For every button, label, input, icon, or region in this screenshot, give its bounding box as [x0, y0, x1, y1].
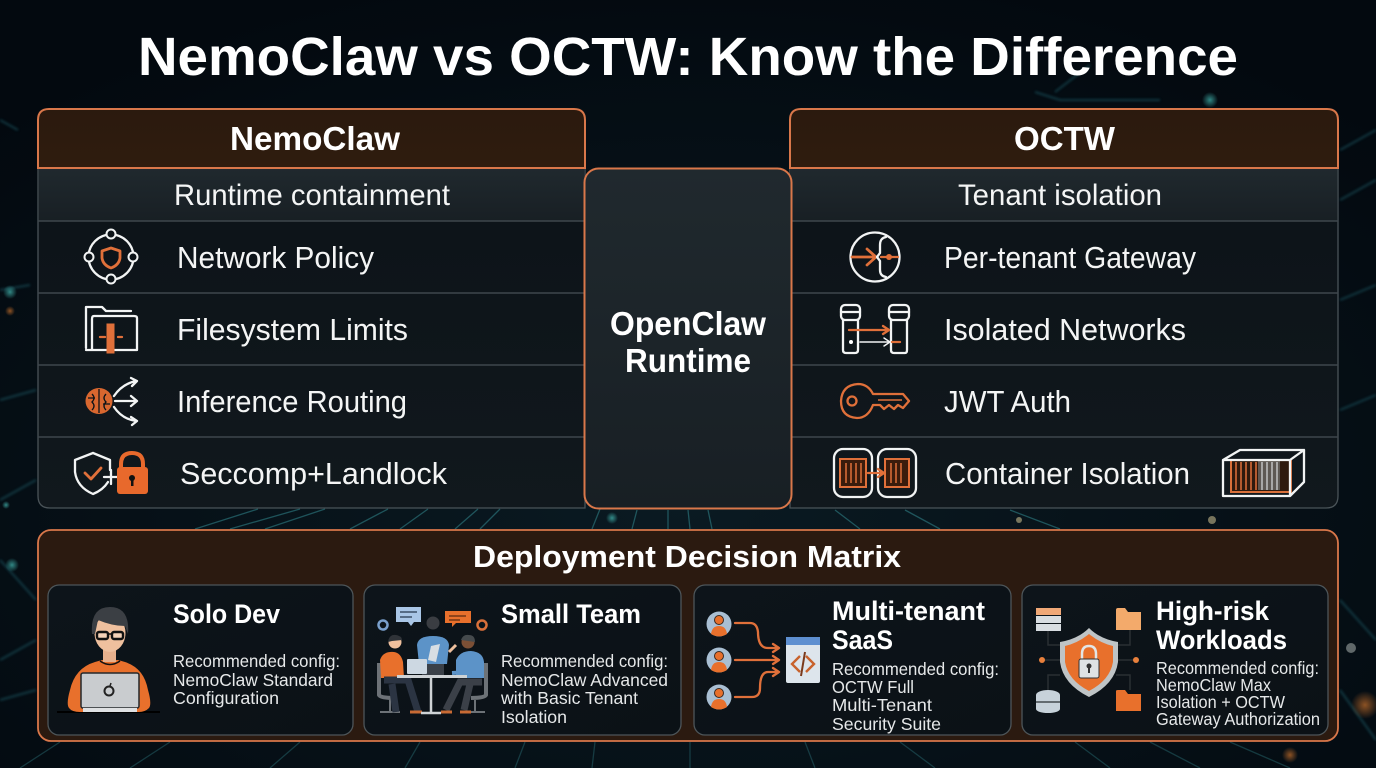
row: Per-tenant Gateway: Per-tenant Gateway — [944, 240, 1196, 275]
card heading: Small Team — [501, 599, 641, 629]
panel header: NemoClaw: NemoClaw — [230, 120, 400, 157]
row: Seccomp+Landlock: Seccomp+Landlock — [180, 456, 447, 491]
panel subheading band — [790, 168, 1338, 221]
panel: NemoClaw — [38, 109, 585, 508]
row: Inference Routing — [86, 378, 407, 425]
row: Isolated Networks — [841, 305, 1186, 353]
panel header: OCTW: OCTW — [1014, 120, 1116, 157]
card: High-risk Workloads — [1022, 585, 1328, 735]
card text — [500, 651, 668, 727]
row: JWT Auth: JWT Auth — [944, 384, 1071, 419]
card text — [832, 659, 999, 734]
panel: Deployment Decision Matrix — [38, 530, 1338, 741]
panel header: OCTW — [790, 109, 1338, 168]
icon: tenants routed to app window — [706, 612, 820, 710]
panel subheading band: Runtime containment — [174, 179, 451, 212]
card text: NemoClaw Standard — [173, 670, 333, 690]
panel header: NemoClaw — [38, 109, 585, 168]
card heading: Multi-tenant — [832, 596, 985, 626]
card heading: Solo Dev — [173, 599, 280, 629]
card text: Gateway Authorization — [1156, 709, 1320, 729]
card text: Isolation + OCTW — [1156, 692, 1285, 712]
row: Container Isolation — [834, 449, 1304, 497]
icon: paired containers — [834, 449, 916, 497]
card text: Configuration — [173, 688, 279, 708]
card text: Recommended config: — [173, 651, 340, 671]
row: Seccomp+Landlock — [75, 453, 447, 494]
icon: network shield — [84, 230, 138, 284]
row: Per-tenant Gateway — [850, 232, 1196, 282]
center panel: OpenClaw Runtime: OpenClaw — [610, 305, 766, 342]
title: NemoClaw vs OCTW: Know the Difference — [138, 27, 1238, 87]
row: Network Policy — [84, 230, 374, 284]
card: Multi-tenant SaaS — [694, 585, 1011, 735]
icon: developer with laptop — [57, 607, 160, 712]
card text: with Basic Tenant — [500, 688, 638, 708]
card heading: High-risk — [1156, 596, 1269, 626]
panel subheading band: Tenant isolation — [958, 179, 1162, 212]
icon: key — [841, 384, 909, 418]
icon: shield and padlock — [75, 453, 148, 494]
row: Container Isolation: Container Isolation — [945, 456, 1190, 491]
card text: Recommended config: — [1156, 658, 1319, 678]
card text: Recommended config: — [501, 651, 668, 671]
card heading — [1156, 596, 1287, 655]
card: Solo Dev — [48, 585, 353, 735]
panel: OCTW — [790, 109, 1338, 508]
card text: NemoClaw Max — [1156, 675, 1271, 695]
center panel: OpenClaw Runtime: Runtime — [625, 342, 751, 379]
card text: Isolation — [501, 707, 567, 727]
card text: Multi-Tenant — [832, 695, 932, 715]
card text: OCTW Full — [832, 677, 914, 697]
card text: Recommended config: — [832, 659, 999, 679]
card: Small Team — [364, 585, 681, 735]
card text — [1156, 658, 1320, 729]
card heading: SaaS — [832, 625, 893, 655]
panel subheading band — [39, 168, 585, 221]
icon: isolated network tubes — [841, 305, 909, 353]
row: Network Policy: Network Policy — [177, 240, 374, 275]
icon: brain with routing arrows — [86, 378, 137, 425]
row: Filesystem Limits: Filesystem Limits — [177, 312, 408, 347]
row: JWT Auth — [841, 384, 1071, 419]
card text: NemoClaw Advanced — [501, 670, 668, 690]
row: Filesystem Limits — [86, 307, 408, 353]
icon: shipping container box — [1223, 450, 1304, 496]
card text: Security Suite — [832, 714, 941, 734]
row: Inference Routing: Inference Routing — [177, 384, 407, 419]
card heading: Workloads — [1156, 625, 1287, 655]
center panel: OpenClaw Runtime — [584, 168, 792, 508]
card text — [173, 651, 340, 708]
row: Isolated Networks: Isolated Networks — [944, 312, 1186, 347]
section heading: Deployment Decision Matrix — [473, 539, 902, 574]
icon: folder with barrier — [86, 307, 137, 353]
icon: gateway — [850, 232, 900, 282]
icon: shield with lock and data nodes — [1036, 608, 1141, 713]
card heading — [832, 596, 985, 655]
icon: team at a table — [378, 607, 486, 713]
